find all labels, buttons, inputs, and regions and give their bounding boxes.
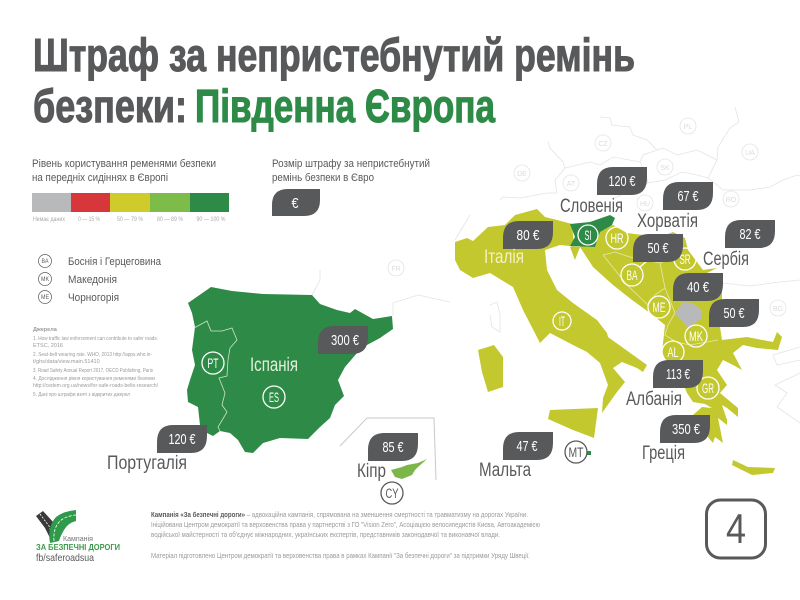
legend: fine size in euro: € (292, 195, 299, 212)
country code labels: SI (584, 228, 592, 243)
faint country codes: PL (684, 124, 692, 131)
country code labels: MT (568, 445, 584, 460)
map: Kosovo (no data) (675, 302, 702, 328)
campaign description: Матеріал підготовлено Центром демократії та верховенства права в рамках Кампанії "За безпечні дороги" за підтримки Уряду Швеції. (151, 551, 530, 560)
country code circles (202, 225, 719, 504)
title: безпеки: (33, 80, 187, 132)
country code labels: SR (680, 252, 691, 267)
legend: seat belt usage scale: Немає даних (33, 217, 65, 223)
country code labels: MK (689, 329, 703, 344)
faint country codes: FR (391, 266, 401, 273)
legend: country abbreviations: Боснія і Герцеговина (68, 256, 162, 268)
fine amounts: 50 € (724, 305, 745, 322)
country names: Албанія (626, 389, 682, 410)
map: Cyprus inset (340, 418, 436, 480)
sources: 1. How traffic law enforcement can contribute to safer roads. (33, 336, 158, 342)
title: Штраф за непристебнутий ремінь (33, 29, 635, 81)
sources: 3. Road Safety Annual Report 2017, OECD Publishing, Paris (33, 368, 153, 374)
country code labels: PT (208, 356, 218, 371)
legend: country abbreviations: BA (42, 259, 48, 265)
fine amounts: 67 € (678, 188, 699, 205)
country names: Мальта (479, 460, 531, 481)
country code labels: AL (668, 345, 679, 360)
fine amounts: 120 € (608, 173, 636, 190)
legend: country abbreviations: Македонія (68, 274, 117, 286)
fine badges (157, 167, 775, 461)
legend: seat belt usage scale: на передніх сидіннях в Європі (32, 172, 168, 184)
map: Malta (587, 451, 591, 455)
country code labels: CY (386, 486, 398, 501)
campaign description: Кампанія «За безпечні дороги» – адвокаційна кампанія, спрямована на зменшення смертності та травматизму на дорогах України. (151, 510, 528, 519)
faint country codes (391, 124, 783, 313)
campaign logo (36, 510, 120, 564)
country names: Кіпр (357, 461, 386, 482)
faint country codes: UA (745, 150, 755, 157)
sources (33, 327, 158, 398)
country code labels: IT (559, 314, 565, 329)
legend: seat belt usage scale (32, 158, 229, 223)
fine amounts: 47 € (516, 438, 538, 455)
legend: seat belt usage scale: 50 — 79 % (117, 217, 144, 223)
campaign description: водійської майстерності та об'єднує міжнародних, українських експертів, представників законодавчої та виконавчої влади. (151, 530, 500, 539)
faint country codes: CZ (598, 141, 608, 148)
fine amounts: 85 € (382, 439, 404, 456)
map: Italy (455, 209, 647, 438)
legend: country abbreviations: MK (41, 277, 49, 283)
sources: t/ghs/data/view.main.51410 (33, 359, 100, 365)
campaign description (151, 510, 541, 560)
sources: 2. Seat-belt wearing rate. WHO, 2013 http://apps.who.in- (33, 352, 152, 358)
legend: fine size in euro (272, 158, 430, 216)
fine amounts: 350 € (672, 421, 700, 438)
legend: country abbreviations: ME (41, 295, 49, 301)
faint country codes: RO (726, 197, 737, 204)
country names: Хорватія (637, 211, 698, 232)
country code labels (208, 228, 714, 501)
legend: seat belt usage scale: 0 — 15 % (78, 217, 101, 223)
faint country codes: AT (567, 181, 576, 188)
country code labels: ME (652, 300, 666, 315)
fine amounts: 40 € (687, 279, 709, 296)
fine amounts: 300 € (331, 332, 359, 349)
fine amounts: 82 € (740, 226, 761, 243)
country names (107, 196, 749, 482)
fine amounts: 50 € (648, 240, 669, 257)
faint country codes: BG (773, 306, 783, 313)
country code labels: GR (702, 381, 714, 396)
country names: Португалія (107, 453, 187, 474)
legend: seat belt usage scale: Рівень користування ременями безпеки (32, 158, 216, 170)
map: Slovenia (570, 215, 615, 247)
country names: Італія (484, 247, 524, 268)
country code labels: BA (626, 268, 638, 283)
faint country codes: HU (640, 201, 650, 208)
country code labels: ES (269, 390, 279, 405)
country code labels: HR (610, 231, 624, 246)
faint country codes: SK (660, 165, 670, 172)
faint country codes: DE (517, 171, 527, 178)
title: Південна Європа (195, 80, 495, 132)
fine amounts: 113 € (666, 366, 690, 383)
campaign logo: Кампанія (63, 535, 93, 543)
page number: 4 (726, 505, 746, 552)
faint background map of Europe (312, 107, 800, 423)
legend: country abbreviations (38, 254, 162, 304)
country names: Словенія (560, 196, 623, 217)
fine amounts: 120 € (168, 431, 196, 448)
page number (706, 500, 766, 558)
sources: ETSC, 2016 (33, 343, 63, 349)
campaign logo: ЗА БЕЗПЕЧНІ ДОРОГИ (36, 542, 120, 552)
legend: country abbreviations: Чорногорія (68, 292, 119, 304)
sources: 4. Дослідження рівня користування ременями безпеки (33, 376, 155, 382)
legend: fine size in euro: ремінь безпеки в Євро (272, 172, 374, 184)
sources: http://cedem.org.ua/news/for-safe-roads-belts-research/ (33, 383, 158, 389)
country names: Сербія (703, 249, 749, 270)
sources: Джерела (33, 327, 58, 333)
legend: seat belt usage scale: 80 — 89 % (157, 217, 184, 223)
sources: 5. Дані про штрафи взяті з відкритих джерел (33, 392, 130, 398)
map: Spain and Portugal (187, 287, 393, 453)
country names: Греція (642, 443, 685, 464)
fine amounts (168, 173, 761, 456)
fine amounts: 80 € (516, 227, 540, 244)
legend: fine size in euro: Розмір штрафу за непристебнутий (272, 158, 430, 170)
campaign description: Ініційована Центром демократії та верховенства права у партнерстві з ГО "Vision Zero", Асоціацією велосипедистів Києва, Автоакадемією (151, 520, 541, 529)
legend: seat belt usage scale: 90 — 100 % (196, 217, 226, 223)
title (33, 29, 635, 132)
map: Balkans and Greece (580, 225, 782, 475)
campaign logo: fb/saferoadsua (36, 552, 94, 564)
country names: Іспанія (250, 355, 298, 376)
